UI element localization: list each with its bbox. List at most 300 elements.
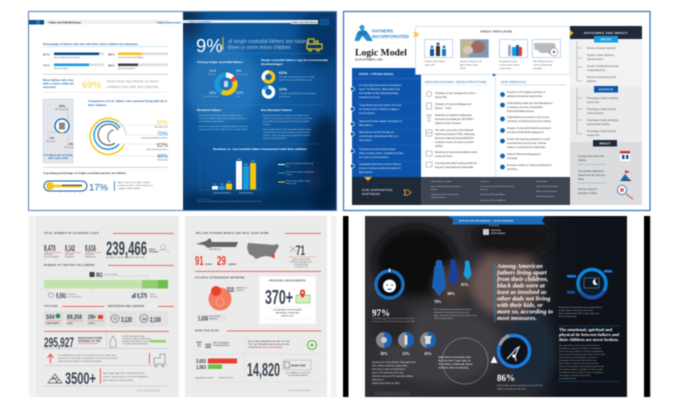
stat: 295,927: 295,927 (44, 334, 74, 350)
quote: among American fathers: black dads were at (497, 282, 545, 290)
section: outputs: Percentage of dads maintaining (587, 119, 619, 122)
stat: 14,820: SOCIAL MEDIA WEBSITE (288, 374, 309, 377)
page header right: Father and Child Well-being (292, 21, 322, 24)
heading: education (43, 42, 168, 47)
panel: custodial fathers diagram: with relative (46, 140, 56, 143)
chart: blog traffic bars (196, 358, 237, 380)
cards: Instagram and LinkedIn: in (142, 316, 147, 322)
panel: need / problems: Black fathers. (359, 124, 373, 127)
footnotes: Sources: U.S. Census Bureau; National Center for Health Statistics; Pew Research Center (197, 200, 261, 203)
logo: Fathers Incorporated: INCORPORATED (372, 34, 410, 39)
text block: non-resident fathers: children in their, when the time are found to care than (263, 117, 313, 120)
panel: custodial fathers diagram (43, 99, 74, 163)
text block: emotional tie: their children are never broken. (559, 337, 619, 342)
panel: our supporting partners: Children Services (431, 197, 447, 199)
cards: YouTube stats: VIDEOS (88, 323, 96, 325)
heading: YouTube and Instagram (44, 305, 174, 308)
stat: 295,927: A WHOLESOME MEDIA LOCATION (122, 340, 150, 343)
stat: 102 posts: 102 (205, 344, 211, 350)
heading: Twitter followers (44, 265, 174, 267)
donut: among single custodial fathers: Other (236, 95, 241, 98)
callout: 69 percent: reported: (43, 85, 56, 89)
section: impact (578, 140, 633, 199)
panel: custodial fathers diagram: 8% (69, 142, 74, 146)
column: our services: emotional living and personal / referrals (507, 142, 547, 145)
chart: Atlanta network circles: PARTNERSHIP (209, 315, 222, 318)
section: inputs: rational services (587, 58, 604, 61)
cards: YouTube stats: 298+ (88, 314, 96, 321)
target: nationwide map (532, 40, 560, 70)
text block: emotional tie: parenting behavior. (559, 377, 577, 380)
cards: Instagram and LinkedIn: 3,120 (121, 315, 132, 324)
heading: dads pad blog (195, 330, 321, 332)
text block: black fathers living apart: week. 47% said they fed or ate (372, 372, 404, 374)
section: impact: transition to father (578, 192, 597, 195)
bar: Twitter followers: MAGIC (150, 293, 156, 296)
panel: need / problems (350, 68, 421, 177)
cards: YouTube stats: SUBSCRIBERS (46, 323, 60, 325)
panel: our supporting partners: Black Child Development Institute – (431, 185, 463, 188)
donut: among single custodial fathers: Among single custodial fathers (197, 60, 243, 64)
column: our services: Campaign (507, 158, 518, 160)
chart: blog traffic bars: RESPONSE 2016 (221, 378, 233, 380)
stat: 3500+ (48, 368, 148, 388)
panel: social media report pages: Fathers Incorporated | Annual Report (288, 389, 311, 392)
chart: resident vs non-resident involvement: times a week (286, 182, 297, 185)
donuts: economically disadvantaged: 17% (279, 86, 287, 92)
chart: thermometer 17 percent: 17% (89, 182, 109, 194)
text block: black fathers living apart: their kids at least several times a (372, 368, 406, 371)
chart: Atlanta network circles: ATLANTA (236, 289, 244, 292)
diagram: clock donut: 30% of Latino dads. (558, 315, 577, 318)
section: outputs: course work (587, 101, 600, 104)
column: organizational infrastructure: Establish an integrated collaborative (435, 114, 473, 117)
stats: Facebook likes: FATHERS (149, 250, 158, 254)
text block: resident fathers: Resident Fathers (197, 108, 222, 112)
donut: among single custodial fathers: 42% (236, 91, 244, 95)
panel: custodial fathers diagram: with two parents (55, 108, 68, 111)
callout: 69 percent: 69% (82, 80, 102, 91)
quote: among American fathers: other dads not living (497, 296, 550, 302)
panel: custodial fathers diagram: 6% (50, 136, 55, 140)
panel: custodial fathers diagram: non-relatives (64, 146, 74, 149)
callout: circle quote: like more than in other dads, for (438, 360, 471, 362)
stat: 295,927 (44, 332, 166, 350)
donut: 97 percent baby: of all dads agree that among black men Dads (372, 317, 414, 320)
panel: need / problems: liquid assets. (359, 139, 373, 142)
stats: Facebook likes (44, 239, 169, 260)
chart: resident vs non-resident involvement: Eat meals with their children every (286, 162, 313, 165)
text block: non-resident fathers (261, 108, 313, 140)
bar chart: education percentages: 91% (43, 52, 50, 56)
column: our services: fatherhood/related services (507, 110, 535, 113)
donut: 86 percent: of black dads say they spend time at least with their (497, 384, 543, 387)
headline: 9 percent: of single custodial fathers are raising (228, 39, 309, 45)
panel: our supporting partners: OUR SUPPORTING (362, 188, 393, 192)
chart: Atlanta network circles: MEMBERS (209, 318, 218, 320)
bar chart: education percentages: 71% (43, 64, 50, 68)
bar: Twitter followers: 8,379 (137, 293, 147, 300)
callout: atlanta arrow: HIGHLIGHT OVER 6MILL INCREASE OF BUILDING A STRONG (58, 357, 118, 360)
quote: among American fathers: more so, according to (497, 308, 553, 316)
bar: Twitter followers (44, 272, 168, 300)
panel: target population (413, 26, 570, 77)
quote: among American fathers: from their children, (497, 276, 549, 283)
text block: non-resident fathers: children, while engaging and average time hold the (263, 134, 311, 137)
panel: our supporting partners: Urban Justice Coalition (431, 180, 452, 183)
section: inputs: Number of dads enlisted to (587, 54, 615, 57)
heading: Facebook likes (44, 232, 174, 235)
chart: thermometer 17 percent: parents are fathers, which translates to (118, 184, 153, 187)
text block: black fathers living apart: helped dress them as often. (372, 382, 401, 385)
stats: Facebook likes: 239,466 (106, 239, 147, 260)
stat: 295,927: MOVING INFORMATION AND (122, 335, 146, 338)
stat: 71: IN ATLANTA AND (294, 263, 309, 266)
panel: our supporting partners (352, 177, 570, 205)
panel: need / problems: their families remain disproportionately (359, 92, 399, 95)
text block: emotional tie: lives of their children, regardless of their marital (559, 368, 603, 371)
bar: Twitter followers: FATHERS (150, 296, 159, 298)
heading: education: Percentage of fathers who live with their minor children by education (43, 42, 138, 46)
chart: Atlanta network circles (197, 286, 247, 322)
column: our services: Promotion website for FathersIncoMessenTo (507, 164, 552, 167)
target: fathers with children: Fathers with children (425, 60, 446, 63)
callout: 69 percent: Most fathers who live (43, 78, 74, 82)
logo: presenter: RESPONSIBLE (491, 233, 506, 235)
column: our services: to manage outcomes of responsible (507, 106, 543, 109)
donuts: economically disadvantaged (261, 58, 328, 98)
stat: 102 posts: FIRST THOUSANDS (213, 342, 230, 344)
section: inputs: Number of traditional and social (587, 65, 619, 68)
heading: growing percentage: A growing percentage of single custodial parents are fathers (43, 171, 127, 175)
chart: blog traffic bars: 3,003 (196, 359, 206, 365)
panel: our supporting partners: Rhode Blade Groups (536, 196, 555, 198)
quote: among American fathers (494, 263, 553, 322)
chart: resident vs non-resident involvement: 74% (237, 159, 241, 161)
column: organizational infrastructure: Increasing diversified funding portfolio for (435, 162, 477, 165)
panel: black fathers dark infographic (343, 216, 651, 397)
logo and stats: partner cities and states: STATES (228, 263, 237, 266)
chart: resident vs non-resident involvement: 10% (227, 182, 231, 184)
column: our services: Understanding Intake and Case Management (507, 102, 553, 105)
section: impact: Increase time spent with (578, 155, 604, 158)
column: our services: related to counseling and relationships (507, 146, 546, 149)
stat: 3500+: 3500+ (65, 369, 96, 388)
callout: 69 percent (42, 78, 160, 91)
chart: neckties: diapered or dressed their child in most (434, 311, 470, 314)
page header right (183, 19, 329, 25)
photo: father and child (368, 218, 554, 390)
heading: Atlanta fatherhood network: ATLANTA FATHERHOOD NETWORK (195, 276, 245, 280)
cards: YouTube stats: 89,258 (67, 314, 82, 321)
logo: presenter: Powered by (489, 224, 499, 227)
stat: 71: HOMEGROWN MARCHES (290, 260, 313, 264)
text block: emotional tie: ability to be actively and positively involved in the (559, 365, 605, 368)
panel: our supporting partners: PARTNERS (362, 192, 380, 196)
title: Logic Model: AS OF OCTOBER 1, 2020 (355, 58, 383, 62)
chart: radial comparison: White non-Hispanic fathers (146, 148, 168, 151)
headline: 9 percent (196, 35, 309, 56)
heading: YouTube and Instagram: YOUTUBE (44, 306, 58, 308)
chart: neckties: 55% of dads have said they feel bathed, (434, 308, 471, 311)
callout: atlanta arrow (48, 353, 165, 367)
donut: 97 percent baby: 97% (372, 308, 390, 318)
bar chart: education percentages: Bachelor's degree (54, 68, 68, 70)
text block: resident fathers (197, 108, 249, 131)
stat: 14,820: BLOG SHARED TO GROW THE (286, 372, 311, 374)
heading: Twitter followers: NUMBER OF TWITTER FOLLOWERS (44, 265, 95, 267)
logo and stats: partner cities and states: CITIES (205, 264, 213, 266)
section: impact: Rate) (578, 178, 584, 181)
section: outputs: OUTPUTS (599, 88, 613, 92)
chart: Atlanta network circles: 1,038 (198, 316, 208, 322)
chart: resident vs non-resident involvement: Resident vs. non-resident father involvement with their children (213, 147, 307, 151)
bar: Twitter followers: INCORPORATED (68, 296, 82, 298)
text block: emotional tie: incarceration, housing, mental health access, and (559, 353, 605, 356)
logo and stats: partner cities and states: 29 (217, 253, 226, 268)
chart: neckties (432, 259, 477, 320)
section: impact: children (578, 159, 587, 162)
chart: resident vs non-resident involvement: Non-Resident Fathers (213, 192, 231, 194)
text block: non-resident fathers: more children that provides the child and custodial (263, 120, 310, 123)
card: speaking engagements: REGIONAL UPDATING (276, 312, 300, 314)
heading: Facebook likes: TOTAL NUMBER OF FACEBOOK LIKES (44, 232, 99, 235)
icon: calendar (620, 151, 630, 161)
bar: Twitter followers: 5,561 (56, 293, 67, 300)
icon: mountain flag (620, 170, 631, 181)
chart: Atlanta network circles: 510 (227, 287, 234, 294)
chart: Atlanta network circles: MEMBERS IN (236, 288, 247, 290)
bar chart: education percentages: 48% (108, 52, 115, 56)
donut: among single custodial fathers: 14% (209, 69, 217, 73)
panel: custodial fathers diagram: U.S. fathers who are living (44, 154, 73, 157)
icons: three pie circles: 41% (424, 352, 432, 356)
section: impact: Successfully fulfilling the (578, 170, 605, 173)
section: inputs: media placements (587, 69, 606, 72)
donuts: economically disadvantaged: disadvantaged (261, 62, 283, 66)
section: outputs: legal parental standing (587, 123, 610, 126)
donuts: economically disadvantaged: 61% (279, 70, 287, 75)
page header left (29, 20, 181, 24)
page header right: Fathers Incorporated (189, 20, 212, 24)
footnotes: Sources: National Health Statistics Reports, CDC (375, 393, 411, 396)
page header left: Father and Child Well-being (49, 21, 81, 24)
panel: our supporting partners: Father Family Foundation (536, 185, 559, 188)
panel: our supporting partners: University of Phoenix/Atlanta (480, 199, 506, 202)
stat: 3500+: AND SERVICE PROVIDERS (103, 379, 134, 382)
bar: Twitter followers: 963 (96, 273, 103, 279)
panel: our supporting partners: Cision, Inc. (480, 181, 490, 183)
chart: thermometer 17 percent (44, 181, 153, 194)
column: organizational infrastructure: framework leveraging the JIM WISM™ (435, 118, 475, 121)
quote: among American fathers: fathers living apart (497, 270, 547, 276)
donuts: economically disadvantaged: Of single custodial fathers are living below (279, 92, 317, 95)
icon: toy train (307, 39, 322, 51)
column: our services: and Policy (507, 169, 518, 171)
target: young fathers: on low-income urban (499, 64, 520, 66)
stat: 3500+: NATIONAL MAILING LISTSERVS WITH (103, 372, 145, 375)
panel: need / problems: report "The Blueprint", Black fathers and (359, 88, 401, 91)
panel: need / problems: As community Donna have incorporated a (359, 84, 402, 87)
card: speaking engagements: 370+ (265, 287, 293, 309)
stat: 295,927: TO EXPAND WITH THE FATHERS (122, 342, 149, 346)
chart: neckties: days, compared with 60% of white fathers and (434, 314, 477, 317)
panel: need / problems: economically vulnerable with little to no (359, 135, 399, 138)
text block: emotional tie: Black fathers continue to demonstrate their (559, 362, 599, 365)
column: organizational infrastructure: (2020c) (435, 146, 443, 148)
text block: emotional tie: building the capacity of all fathers, particularly (559, 347, 602, 350)
callout: circle quote: Black fathers demonstrate dads (438, 356, 472, 359)
text block: non-resident fathers: • Non-resident fathers, including most fathers have (262, 114, 309, 117)
diagram: clock donut: daily, compared with 38% of white dads and (558, 312, 600, 315)
panel: custodial fathers diagram: with a minor child (48, 157, 68, 160)
section: inputs (577, 36, 619, 83)
text block: resident fathers: number of children. Most want to shape their lives in (199, 117, 248, 120)
donut: 86 percent (497, 336, 543, 390)
page header left: Fathers Incorporated (157, 21, 181, 24)
bar: Twitter followers: FATHERS (68, 293, 77, 296)
text block: emotional tie: stereotype in the media about black men. (559, 359, 597, 362)
stat: 71 (288, 242, 316, 268)
donut: 86 percent: children who don't live with them. (497, 388, 527, 390)
section: outputs: Percentage of dads completing (587, 97, 619, 100)
text block: black fathers living apart: diapered or (372, 378, 384, 382)
cards: Instagram and LinkedIn: 2,100 (150, 315, 161, 324)
column: organizational infrastructure: Utilization of case management system – (435, 92, 478, 95)
logo: presenter (483, 224, 506, 235)
target: fathers with children: ages 0-18 (425, 64, 436, 66)
chart: resident vs non-resident involvement (200, 147, 314, 194)
section: impact: IMPACT (599, 142, 611, 146)
stats: Facebook likes: INCORPORATED (44, 256, 60, 258)
footnotes (197, 199, 261, 203)
stat: 14,820: DADS PAD (291, 364, 305, 368)
target: young fathers: Geographical focus (499, 60, 519, 63)
panel: need / problems: the hardest cohort of Dads to engage in (359, 108, 400, 111)
target: fathers with children (424, 40, 452, 66)
chart: blog traffic bars: 1,063 (196, 365, 206, 371)
target: hispanic and black fathers: Hispanic Hispanic and (460, 61, 482, 63)
cards: YouTube stats: 504 (46, 314, 55, 321)
heading: million fathers march: MILLION FATHERS MARCH AND REAL DADS RAMP (196, 232, 269, 235)
target: hispanic and black fathers: Black fathers ages (460, 64, 479, 66)
cards: YouTube stats (44, 311, 106, 327)
column: organizational infrastructure: ORGANIZATIONAL INFRASTRUCTURE (425, 80, 487, 84)
ribbon: banner (448, 216, 545, 224)
stat: 71: COLUMBUS, GA (294, 266, 309, 268)
callout: top blog: BLOG WAS AWARDED AS ONE OF THE (248, 340, 290, 343)
bar chart: education percentages: High school graduate (118, 67, 135, 70)
cards: Instagram and LinkedIn (108, 311, 168, 327)
column: our services: and about Social Media engagement (507, 131, 544, 134)
column: organizational infrastructure: Fatherhood Network (TED): Hardening (435, 133, 475, 136)
logo and stats: partner cities and states: PARTNERS IN (209, 248, 222, 251)
chart: neckties: 60% (448, 292, 455, 296)
column: organizational infrastructure: Monitoring of social and traditional media (435, 151, 477, 154)
text block: emotional tie: stereotypes and myths about their (559, 374, 591, 377)
chart: radial comparison: Asian Americans (155, 126, 168, 128)
panel: social media report pages (29, 216, 336, 397)
panel: need / problems: Stigma and media negative stereotypes of (359, 120, 402, 123)
panel: target population: TARGET POPULATION (480, 30, 512, 34)
callout: top blog: COUNTRY BY BLOG PROGRESS (248, 347, 282, 349)
column: organizational infrastructure: impact via Cision (435, 155, 453, 158)
text block: black fathers living apart: with their kids and 27% said they bathed, (372, 375, 414, 378)
stats: Facebook likes: MAGIC (149, 248, 156, 251)
chart: resident vs non-resident involvement: day (286, 166, 289, 168)
chart: resident vs non-resident involvement: a week (286, 174, 292, 176)
footnotes (375, 392, 411, 396)
card: speaking engagements (259, 276, 316, 324)
target: hispanic and black fathers: 18-65 (460, 68, 466, 70)
column: outcomes and impact (570, 26, 642, 205)
panel: need / problems: Black fathers and their families are (359, 131, 395, 134)
callout: 69 percent: with a minor child are (42, 82, 74, 86)
stat: 295,927: CONTENT/CONNECTION BETWEEN (122, 338, 152, 340)
callout: circle quote: their children. Additionally, fathers (438, 363, 474, 366)
quote: among American fathers: most measures. (497, 315, 537, 322)
panel: our supporting partners: Mixture Female Groups (536, 190, 557, 193)
column: organizational infrastructure: & distance learner of service providers (435, 141, 475, 144)
chart: thermometer 17 percent: roughly 2 million children. (118, 188, 141, 190)
panel: our supporting partners: Services (480, 189, 488, 191)
column: organizational infrastructure: Enterprise National Network(ENDNG) – (435, 137, 476, 140)
chart: radial comparison: Black fathers (158, 158, 168, 162)
quote: among American fathers: least as involved as (497, 289, 547, 296)
target: nationwide map: (virtually) (533, 67, 542, 70)
stat: 295,927: MARIJUANA GUIDE (78, 336, 103, 340)
heading: YouTube and Instagram: INSTAGRAM AND LINKEDIN (108, 305, 144, 308)
donuts: economically disadvantaged: poverty level (279, 95, 291, 98)
callout: 69 percent: children live with two parents. (107, 84, 159, 89)
text block: emotional tie: or residential status, and in the face of negative (559, 371, 603, 374)
section: impact: Fatherhood role (Success (578, 174, 606, 177)
text block: non-resident fathers: training (263, 123, 271, 126)
callout: circle quote: and these older are still going. (438, 366, 470, 370)
chart: resident vs non-resident involvement: 66% (244, 164, 248, 166)
chart: resident vs non-resident involvement: Resident Fathers (239, 192, 253, 194)
stats: Facebook likes: FATHERS (85, 253, 94, 256)
text block: non-resident fathers: Non-Resident Fathers (261, 108, 293, 112)
panel: need / problems: Sustainable Data Driven Service Delivery (359, 163, 402, 166)
chart: radial comparison (90, 118, 168, 162)
panel: need / problems: Young African American fathers 16-24 are (359, 104, 402, 107)
bar chart: education percentages (43, 52, 168, 70)
section: outputs (577, 86, 619, 137)
column: organizational infrastructure: long term organizational sustainability (435, 166, 474, 169)
bar chart: education percentages: Less than a high school diploma (118, 56, 144, 59)
target: hispanic and black fathers (460, 40, 488, 70)
chart: neckties: 65% (461, 283, 469, 287)
diagram: clock donut: Nearly 36% of black fathers who lived with their (558, 306, 602, 309)
stats: Facebook likes: 8,142 (65, 244, 75, 253)
column: organizational infrastructure: digital & social ecosystem (435, 122, 461, 125)
stats: Facebook likes: PARENTING (85, 256, 96, 258)
logo: Fathers Incorporated (354, 25, 410, 41)
column: our services: Understanding community for peer to peer (507, 116, 549, 119)
text block: resident fathers: • Men were more likely to have a resident minor (198, 114, 242, 117)
stat: 14,820: 14,820 (247, 360, 280, 380)
callout: 69 percent: More than two-thirds of minor (107, 78, 160, 84)
panel: our supporting partners: Atlanta (431, 188, 438, 191)
callout: circle quote (438, 338, 498, 384)
icon: magnifier (617, 185, 633, 199)
panel: custodial fathers diagram: 26% (59, 104, 65, 108)
column: organizational infrastructure: Utilization of Learning Management (435, 103, 471, 106)
stat: 102 posts (196, 342, 230, 350)
section: inputs: INPUTS (600, 38, 612, 42)
headline: 9 percent: 9% (196, 35, 223, 56)
